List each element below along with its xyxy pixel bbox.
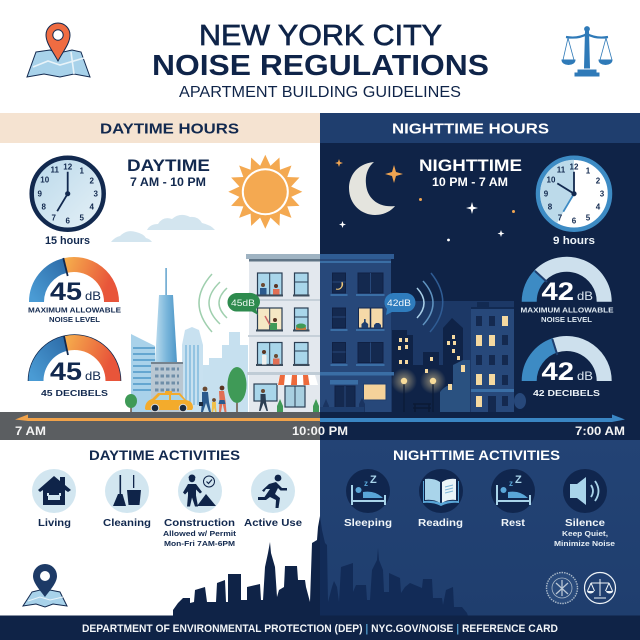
icon: scales badge	[584, 572, 616, 604]
timeline label: 10:00 PM: 10:00 PM	[292, 426, 348, 438]
gauge: daytime maximum 45 dB	[28, 258, 121, 324]
timeline: nighttime road	[320, 412, 640, 440]
callout: 42dB: 42dB	[387, 298, 411, 309]
icon: sun	[228, 155, 302, 229]
activity: silence	[554, 469, 615, 548]
clock: daytime: 8	[41, 203, 46, 212]
footer bar: DEPARTMENT OF ENVIRONMENTAL PROTECTION (DEP) | NYC.GOV/NOISE | REFERENCE CARD	[82, 623, 558, 635]
text: 15 hours: 15 hours	[45, 235, 90, 247]
gauge: nighttime 42 decibels	[529, 339, 604, 398]
illustration: daytime apartment building	[246, 254, 320, 412]
activity: reading	[418, 469, 463, 529]
skyline: daytime side	[173, 516, 320, 616]
activity: reading: Reading	[418, 518, 463, 529]
background: night scene panel	[320, 143, 640, 413]
callout: 45dB: 45dB	[231, 298, 255, 309]
clock: nighttime: 4	[596, 203, 601, 212]
gauge: nighttime maximum 42 dB: NOISE LEVEL	[541, 317, 593, 324]
activity: construction: Construction	[164, 518, 235, 529]
illustration: night row building	[471, 302, 514, 412]
gauge: daytime 45 decibels	[28, 335, 120, 398]
clock: nighttime: 8	[548, 203, 553, 212]
activity: rest	[491, 469, 535, 529]
clock: daytime: 5	[79, 214, 84, 223]
clock: nighttime: 10	[547, 176, 556, 185]
clock: daytime: 4	[89, 203, 94, 212]
text: nighttime title and hours	[419, 156, 522, 189]
title block	[152, 20, 489, 101]
clock: nighttime: 5	[586, 214, 591, 223]
activity: construction: Mon-Fri 7AM-6PM	[164, 539, 235, 548]
callout: 45dB	[227, 293, 260, 315]
clock: daytime: 2	[89, 177, 94, 186]
icon: map with location pin	[27, 23, 90, 77]
activity: active use: Active Use	[244, 518, 302, 529]
icon: crescent moon	[349, 162, 395, 215]
header: daytime hours	[0, 113, 320, 143]
gauge: nighttime maximum 42 dB: 42	[542, 278, 574, 306]
header: nighttime hours: NIGHTTIME HOURS	[392, 120, 549, 138]
clock: daytime	[32, 158, 104, 230]
icon: stars	[335, 159, 515, 241]
gauge: nighttime 42 decibels: dB	[577, 369, 593, 383]
clock: daytime: 11	[50, 166, 59, 175]
gauge: daytime 45 decibels: 45	[50, 358, 82, 386]
activity: construction	[163, 469, 237, 548]
icon: bottom map pin	[23, 564, 67, 607]
sound waves: nighttime	[417, 273, 443, 332]
clock: nighttime: 6	[572, 217, 577, 226]
clock: nighttime: 7	[558, 214, 563, 223]
gauge: nighttime maximum 42 dB: dB	[577, 289, 593, 303]
text: nighttime title and hours: NIGHTTIME	[419, 156, 522, 175]
activity: cleaning: Cleaning	[103, 518, 151, 529]
timeline: daytime road: 7 AM	[15, 426, 46, 438]
illustration: trees	[125, 367, 246, 412]
clock: nighttime: 12	[570, 163, 579, 172]
gauge: nighttime maximum 42 dB	[520, 264, 614, 324]
clock: nighttime: 2	[596, 177, 601, 186]
gauge: daytime maximum 45 dB: 45	[50, 278, 82, 306]
heading: nighttime activities: NIGHTTIME ACTIVITIES	[393, 447, 560, 463]
activity: sleeping: z	[364, 479, 368, 488]
sound waves: daytime	[199, 274, 227, 332]
icon: city seal	[546, 572, 578, 604]
clock: nighttime: 1	[586, 167, 591, 176]
gauge: nighttime 42 decibels: 42	[542, 358, 574, 386]
clock: daytime: 3	[93, 190, 98, 199]
callout: 42dB	[384, 293, 416, 315]
icon: scales of justice	[562, 27, 612, 76]
illustration: night city background	[390, 301, 514, 412]
clock: nighttime: 3	[600, 190, 605, 199]
activity: cleaning	[103, 469, 151, 529]
text: daytime title and hours	[127, 156, 210, 189]
activity: rest: z	[509, 479, 513, 488]
clock: nighttime: 9	[544, 190, 549, 199]
clock: nighttime: 11	[557, 166, 566, 175]
activity: rest: Z	[515, 474, 522, 486]
clock: daytime: 1	[79, 167, 84, 176]
illustration: daytime skyline	[131, 268, 248, 412]
illustration: street lamps	[391, 368, 526, 412]
text: daytime title and hours: DAYTIME	[127, 156, 210, 175]
activity: living: Living	[38, 518, 71, 529]
activity: silence: Silence	[565, 518, 605, 529]
timeline: nighttime road: 7:00 AM	[575, 426, 625, 438]
activity: silence: Keep Quiet,	[562, 529, 608, 538]
activity: sleeping: Z	[370, 474, 377, 486]
text: daytime title and hours: 7 AM - 10 PM	[130, 177, 206, 189]
activity: living	[32, 469, 76, 529]
header: nighttime hours	[320, 113, 640, 143]
skyline: nighttime side	[320, 516, 468, 616]
title block: NOISE REGULATIONS	[152, 50, 489, 82]
activity: rest: Rest	[501, 518, 526, 529]
clock: daytime: 9	[37, 190, 42, 199]
illustration: taxi	[145, 391, 193, 412]
title block: NEW YORK CITY	[199, 20, 442, 52]
activity: silence: Minimize Noise	[554, 539, 615, 548]
gauge: daytime maximum 45 dB: MAXIMUM ALLOWABLE	[28, 308, 121, 314]
header: daytime hours: DAYTIME HOURS	[100, 120, 239, 138]
clock: daytime: 7	[51, 214, 56, 223]
text: nighttime title and hours: 10 PM - 7 AM	[432, 177, 508, 189]
gauge: daytime maximum 45 dB: NOISE LEVEL	[49, 317, 101, 324]
illustration: nighttime apartment building	[320, 254, 394, 412]
gauge: daytime 45 decibels: 45 DECIBELS	[41, 388, 108, 398]
heading: daytime activities: DAYTIME ACTIVITIES	[89, 447, 240, 463]
activity: sleeping: Sleeping	[344, 518, 392, 529]
activity: active use	[244, 469, 302, 529]
illustration: family walking	[199, 386, 226, 412]
timeline: daytime road	[0, 412, 320, 440]
gauge: nighttime maximum 42 dB: MAXIMUM ALLOWABLE	[520, 308, 614, 314]
title block: APARTMENT BUILDING GUIDELINES	[179, 84, 461, 101]
clock: daytime: 10	[40, 176, 50, 185]
background: night activities panel	[320, 440, 640, 616]
clock: daytime: 12	[63, 163, 73, 172]
clock: daytime: 6	[65, 217, 70, 226]
footer bar	[0, 616, 640, 640]
text: 9 hours: 9 hours	[553, 235, 595, 247]
clock: nighttime	[538, 158, 610, 230]
activity: sleeping	[344, 469, 392, 529]
gauge: nighttime 42 decibels: 42 DECIBELS	[533, 388, 600, 398]
icon: clouds	[111, 215, 215, 242]
gauge: daytime maximum 45 dB: dB	[85, 289, 101, 303]
gauge: daytime 45 decibels: dB	[85, 369, 101, 383]
activity: construction: Allowed w/ Permit	[163, 529, 237, 538]
